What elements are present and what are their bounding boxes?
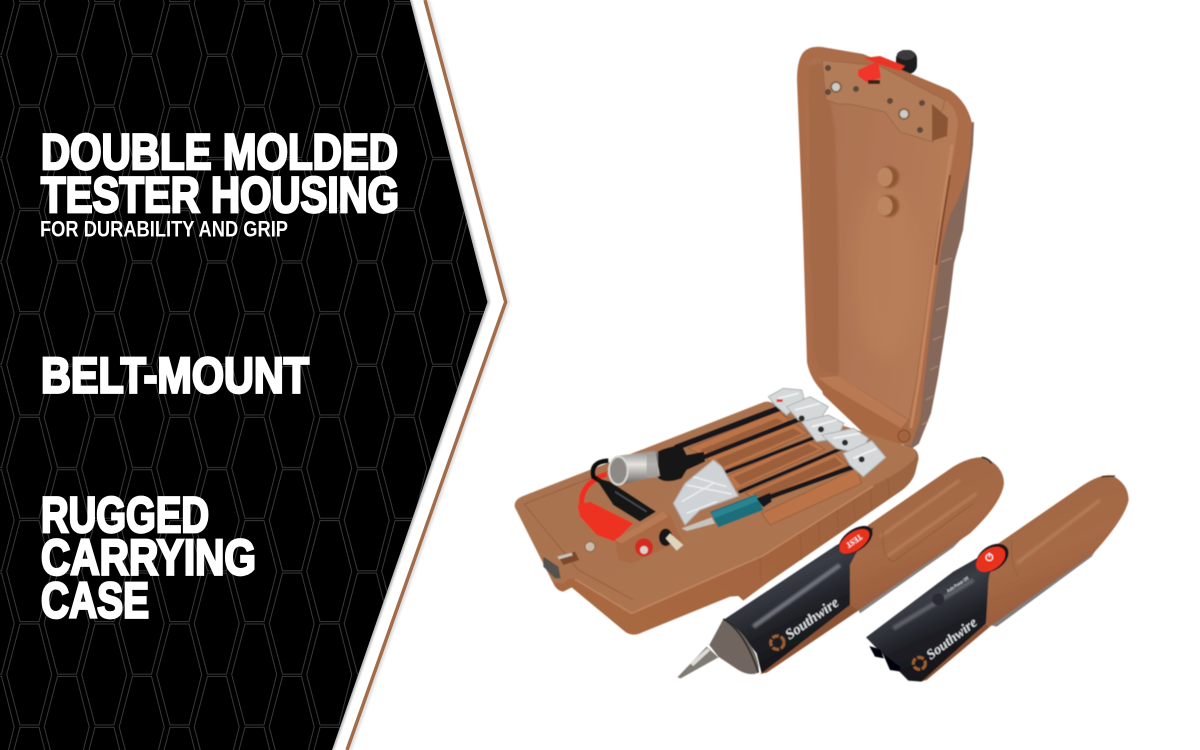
side channel: [936, 175, 950, 265]
heading: rugged carrying case: CARRYING: [41, 528, 256, 586]
rim highlight: [911, 145, 952, 428]
case lid: [797, 47, 973, 455]
brand logo: [913, 657, 925, 669]
lower brown rim: [760, 605, 858, 674]
grip highlight: [1017, 500, 1100, 563]
red mark: [777, 399, 783, 402]
hinge: [818, 376, 910, 455]
test button: TEST: [844, 532, 864, 550]
base body: [515, 402, 918, 635]
tester: tone generator: [866, 475, 1129, 682]
grip highlight: [880, 480, 977, 557]
grip contour: [1011, 540, 1018, 577]
heading: rugged carrying case: [41, 486, 256, 628]
product photo: open case: [515, 47, 1129, 682]
cable slots: [688, 411, 862, 525]
brown grip: [848, 457, 1004, 611]
side ribs: [760, 470, 890, 580]
lid pegs: [878, 166, 899, 217]
red clip lead: [577, 474, 633, 542]
cap mark: [1102, 474, 1115, 479]
led: [932, 593, 944, 605]
plate shadow corner: [932, 104, 948, 141]
connector glints: [778, 393, 877, 458]
brown grip: [977, 475, 1129, 627]
tester: test probe: [677, 457, 1004, 678]
heading: double molded tester housing: [41, 123, 399, 223]
screw holes and screws: [825, 65, 925, 133]
black wires: [677, 407, 858, 499]
lower brown rim: [920, 623, 990, 682]
subheading: FOR DURABILITY AND GRIP: [40, 216, 288, 242]
probe needle: [677, 647, 718, 678]
black clip lead: [593, 461, 656, 522]
black body: [723, 527, 873, 673]
slot recesses: [700, 418, 843, 498]
terminal post: [615, 512, 683, 563]
brown chevron line: [347, 0, 508, 750]
heading: rugged carrying case: CASE: [41, 572, 149, 628]
gray tag: [543, 557, 561, 578]
body sheen: [753, 565, 840, 627]
black chevron panel: [0, 0, 490, 750]
latch slot: [557, 552, 579, 565]
clear connectors: [768, 388, 886, 477]
grip contour: [883, 503, 973, 562]
large clear connector: [673, 460, 738, 525]
body sheen: [893, 580, 973, 628]
knob: [896, 50, 917, 74]
case base: [515, 388, 918, 635]
teal plug: [710, 493, 772, 527]
brand logo: [771, 636, 784, 649]
brand name: Southwire: [924, 616, 980, 663]
red latch: [858, 56, 905, 84]
heading: double molded tester housing: DOUBLE MOLDED: [41, 123, 398, 180]
auto power off label: Auto Power Off: [946, 576, 970, 594]
base top surface: [515, 402, 916, 612]
lid rim: [797, 47, 972, 446]
heading: double molded tester housing: TESTER HOUSING: [41, 166, 399, 223]
test button: [834, 520, 878, 560]
lid left shaded strip: [808, 62, 839, 376]
inner lip: [524, 409, 873, 600]
translucent nose: [709, 619, 759, 674]
heading: rugged carrying case: RUGGED: [41, 486, 209, 543]
brand name: Southwire: [782, 595, 843, 643]
cap mark: [982, 457, 992, 463]
lid back side with ridges: [905, 123, 973, 452]
shadow strip: [990, 548, 1097, 627]
lid inner face: [806, 58, 958, 422]
lip highlight: [575, 486, 873, 613]
lid central glow: [853, 180, 917, 360]
black body: [866, 558, 993, 682]
silver blade: [682, 517, 715, 531]
coax boot: [656, 445, 705, 481]
end openings: [869, 646, 901, 672]
power button: [971, 538, 1014, 578]
heading: belt-mount: BELT-MOUNT: [41, 346, 309, 404]
screw plate: [822, 60, 945, 142]
connector dark tips: [799, 415, 865, 462]
screw: [585, 542, 595, 552]
shadow strip: [857, 530, 970, 613]
coax connector: [609, 451, 660, 485]
